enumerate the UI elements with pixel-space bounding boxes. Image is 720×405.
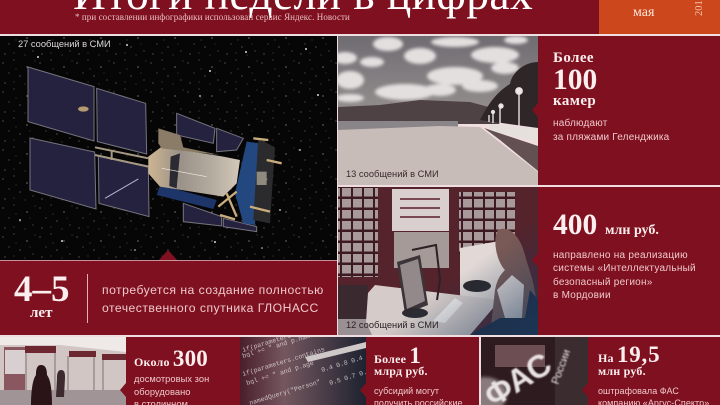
notch: FAS: [582, 383, 588, 397]
code text: bql += " and p.age: [246, 360, 315, 387]
description: [374, 386, 463, 405]
solar arrays: [28, 67, 257, 232]
woman: [490, 229, 538, 335]
panel: fine stat: [588, 337, 720, 405]
panel: satellite photo: [0, 36, 337, 260]
panel: beach photo: [338, 36, 538, 185]
description: безопасный регион»: [553, 277, 653, 288]
panel: subsidies stat: [366, 337, 479, 405]
metal detector frames: [26, 352, 103, 405]
monitor: [397, 255, 428, 314]
month: мая: [633, 5, 654, 20]
media count: satellite: 27 сообщений в СМИ: [18, 39, 111, 49]
panel: metro stat: [126, 337, 240, 405]
description: в Мордовии: [553, 290, 611, 301]
partition: [460, 240, 505, 300]
panel: region stat: [538, 187, 720, 335]
wall maps: [392, 189, 449, 231]
unit: million rubles: млн руб.: [605, 223, 659, 238]
unit: million rubles: млн руб.: [598, 364, 646, 378]
truss: [95, 147, 148, 167]
divider: [87, 274, 88, 323]
label: около 300: Около 300: [134, 346, 208, 371]
notch: [532, 253, 538, 267]
panel: code photo: [240, 337, 366, 405]
header band: [0, 0, 720, 34]
description: потребуется на создание полностью: [102, 283, 324, 297]
stat: 4–5: 4–5: [14, 269, 70, 310]
panel: control room photo: [338, 187, 538, 335]
description: направлено на реализацию: [553, 250, 688, 261]
description: отечественного спутника ГЛОНАСС: [102, 300, 319, 314]
gold fittings: [218, 138, 282, 219]
panel: satellite stat: [0, 260, 337, 335]
description: за пляжами Геленджика: [553, 132, 669, 142]
FAS sign: России: [550, 348, 573, 386]
description: оборудовано: [134, 387, 191, 397]
notch: [532, 103, 538, 117]
media count: beach: 13 сообщений в СМИ: [346, 169, 439, 179]
satellite: [28, 67, 282, 232]
label: более 1: Более 1: [374, 343, 421, 368]
description: [553, 118, 670, 142]
media count: control room: 12 сообщений в СМИ: [346, 320, 439, 330]
description: [102, 283, 324, 314]
people: [31, 365, 52, 405]
label: более: Более: [553, 50, 594, 66]
code text: if(parameters.contains: [242, 346, 326, 378]
description: оштрафовала ФАС: [598, 386, 679, 396]
panel: beach stat: [538, 36, 720, 185]
description: системы «Интеллектуальный: [553, 263, 696, 274]
blue radiators: [157, 185, 217, 209]
desk: [366, 285, 500, 335]
notch: metro: [120, 383, 126, 397]
label: на 19,5: На 19,5: [598, 342, 660, 367]
description: наблюдают: [553, 118, 608, 129]
panel: FAS photo: [481, 337, 588, 405]
panel: metro photo: [0, 337, 126, 405]
description: [553, 250, 696, 301]
description: субсидий могут: [374, 386, 439, 396]
lamps: [489, 88, 522, 126]
stat: 400: 400: [553, 209, 597, 241]
unit: billion rubles: млрд руб.: [374, 364, 428, 378]
notch: code: [360, 383, 366, 397]
description: [134, 374, 209, 405]
description: досмотровых зон: [134, 374, 209, 384]
notch: satellite: [159, 250, 177, 260]
unit: years: лет: [30, 305, 52, 321]
left wall base: [338, 285, 368, 319]
description: [598, 386, 709, 405]
unit: cameras: камер: [553, 93, 596, 109]
stat: 100: 100: [553, 64, 597, 96]
promenade wall: [484, 128, 538, 171]
keyboard: [433, 298, 463, 323]
code text: [242, 322, 379, 405]
sand: [338, 126, 538, 185]
mountains: [338, 100, 500, 124]
clouds: [333, 36, 528, 102]
footnote: * при составлении инфографики использован сервис Яндекс. Новости: [75, 12, 350, 22]
trees: [480, 62, 538, 128]
monitor walls: [338, 187, 378, 277]
windows: [4, 347, 26, 405]
body: [148, 147, 240, 197]
date box: [599, 0, 720, 34]
